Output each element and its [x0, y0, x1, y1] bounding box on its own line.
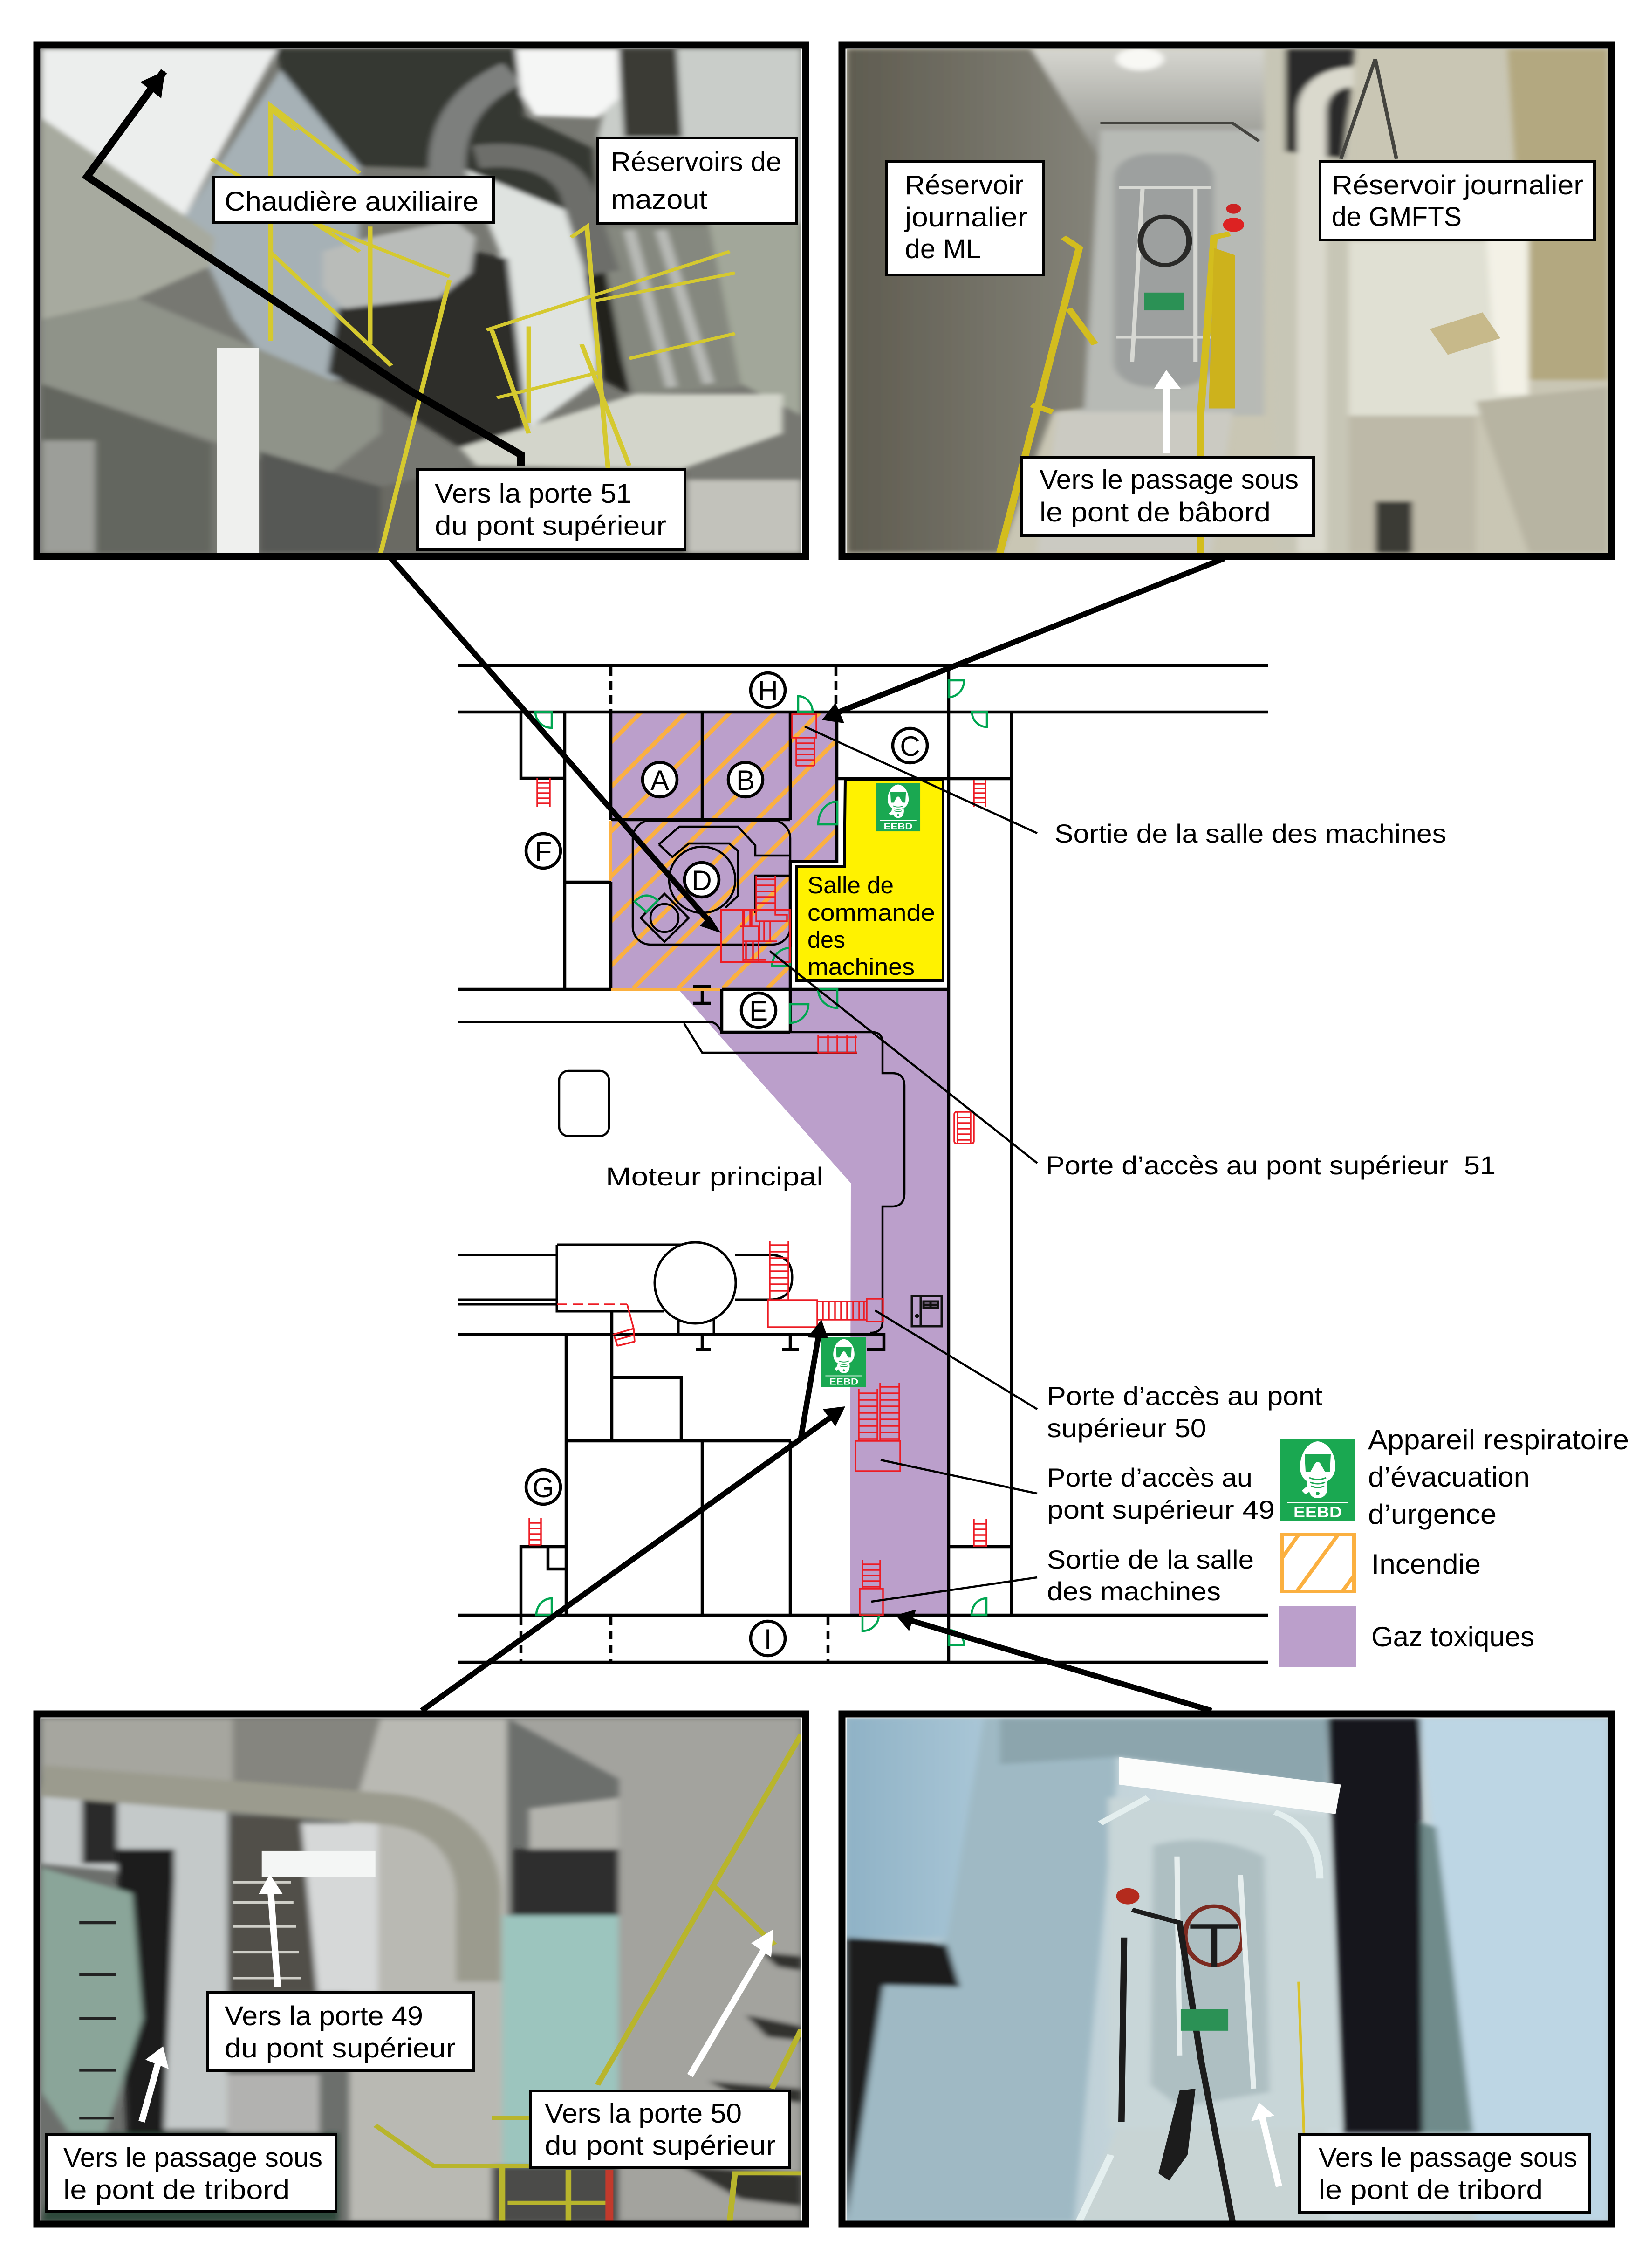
legend icon: EEBD: EEBD [1293, 1504, 1342, 1521]
label: fuel tanks [597, 138, 797, 224]
label: starboard passage [1300, 2135, 1589, 2213]
label: ML tank: Réservoir [905, 170, 1024, 200]
photo frame [842, 1714, 1612, 2224]
room marker letters: D [691, 865, 712, 896]
route arrow [1154, 370, 1181, 453]
room marker letters: C [900, 731, 920, 762]
callout labels: des machines [1047, 1576, 1221, 1606]
legend text: EEBD: d’évacuation [1368, 1461, 1530, 1493]
label: port passage [1022, 457, 1314, 536]
floor plan walls [458, 665, 1268, 1662]
callout labels: Sortie de la salle des machines [1054, 819, 1446, 848]
label: boiler: Chaudière auxiliaire [225, 186, 479, 217]
label: door 50: du pont supérieur [545, 2131, 776, 2161]
photo frame [842, 45, 1612, 556]
label: door 50: Vers la porte 50 [545, 2098, 742, 2129]
callout labels: Porte d’accès au pont [1047, 1381, 1322, 1411]
arrow: photo 3 to door 49 [422, 1406, 845, 1711]
callout labels: Sortie de la salle [1047, 1545, 1254, 1574]
label: fuel tanks: Réservoirs de [611, 147, 781, 177]
panel: photo bottom left [37, 1714, 806, 2224]
label: door 49: Vers la porte 49 [225, 2001, 423, 2031]
room marker letters: H [758, 675, 778, 706]
legend text: EEBD [1368, 1424, 1629, 1530]
icon: EEBD corridor: EEBD [829, 1377, 858, 1387]
panel: photo bottom right [842, 1714, 1612, 2224]
icon: EEBD control room [876, 783, 920, 831]
label: port passage: Vers le passage sous [1040, 465, 1299, 495]
photo frame [37, 45, 806, 556]
label: boiler [214, 177, 493, 223]
arrow: branch to door 50 [801, 1320, 828, 1437]
purple toxic gas zone [611, 712, 949, 1615]
label: port passage: le pont de bâbord [1040, 497, 1271, 528]
control room label: Salle de [807, 872, 894, 898]
label: door 51 [417, 470, 685, 549]
legend swatch: fire [1280, 1533, 1356, 1593]
label: door 49: du pont supérieur [225, 2033, 456, 2063]
route arrow [1251, 2103, 1279, 2186]
label: door 51: du pont supérieur [435, 511, 666, 541]
icon: EEBD control room: EEBD [884, 822, 912, 831]
room marker letters: A [650, 765, 669, 796]
room marker letters: E [749, 995, 768, 1027]
label: ML tank: de ML [905, 234, 981, 264]
label: starboard passage: Vers le passage sous [63, 2143, 322, 2173]
label: fuel tanks: mazout [611, 185, 707, 215]
legend text: EEBD: Appareil respiratoire [1368, 1424, 1629, 1455]
room marker letters: I [764, 1624, 772, 1655]
door icon [912, 1296, 942, 1326]
room marker letters: B [736, 765, 755, 796]
room markers [526, 673, 927, 1656]
callout labels: Porte d’accès au [1047, 1463, 1252, 1492]
label: ML tank [886, 161, 1044, 275]
label: GMFTS tank: Réservoir journalier [1332, 170, 1583, 200]
arrow: photo 1 to stairs [388, 555, 721, 933]
legend [1279, 1424, 1629, 1667]
room marker letters: G [533, 1472, 554, 1503]
control room [797, 779, 943, 980]
legend text: EEBD: d’urgence [1368, 1499, 1497, 1530]
arrow: photo 2 to exit [822, 558, 1225, 723]
callout labels: pont supérieur 49 [1047, 1495, 1275, 1524]
control room label [807, 872, 935, 980]
legend text: gas: Gaz toxiques [1371, 1621, 1534, 1652]
control room label: des [807, 926, 845, 953]
green doors [535, 680, 987, 1645]
label: door 51: Vers la porte 51 [435, 479, 632, 509]
icon: EEBD corridor [821, 1337, 866, 1387]
arrow: photo 4 to exit [896, 1610, 1211, 1711]
label: GMFTS tank [1320, 161, 1594, 240]
legend text: fire: Incendie [1371, 1549, 1481, 1580]
label: starboard passage: le pont de tribord [1319, 2175, 1543, 2205]
label: starboard passage: Vers le passage sous [1319, 2143, 1577, 2173]
label: starboard passage [47, 2135, 336, 2211]
control room label: commande [807, 899, 935, 926]
room marker letters [533, 675, 920, 1655]
callout lines [770, 726, 1037, 1602]
label: door 49 [207, 1993, 473, 2071]
callout labels: supérieur 50 [1047, 1413, 1206, 1443]
label: GMFTS tank: de GMFTS [1332, 202, 1462, 232]
legend swatch: gas [1279, 1606, 1356, 1667]
label: door 50 [530, 2091, 789, 2168]
legend icon: EEBD [1280, 1439, 1355, 1521]
route arrows [142, 1874, 773, 2122]
label: main engine: Moteur principal [606, 1162, 823, 1191]
control room label: machines [807, 953, 915, 980]
route arrow [87, 71, 521, 466]
corridor and engine outlines [458, 821, 904, 1335]
fire hatching [611, 712, 839, 988]
callout labels [1046, 819, 1496, 1606]
red stairs and exits [529, 714, 986, 1615]
room marker letters: F [535, 836, 552, 867]
storage room E [722, 989, 790, 1032]
panel: photo top right [842, 45, 1612, 556]
orange fire boundary [611, 821, 720, 989]
panel: photo top left [37, 45, 806, 556]
label: ML tank: journalier [904, 202, 1027, 233]
label: starboard passage: le pont de tribord [63, 2175, 290, 2205]
photo frame [37, 1714, 806, 2224]
callout labels: Porte d’accès au pont supérieur 51 [1046, 1151, 1496, 1180]
